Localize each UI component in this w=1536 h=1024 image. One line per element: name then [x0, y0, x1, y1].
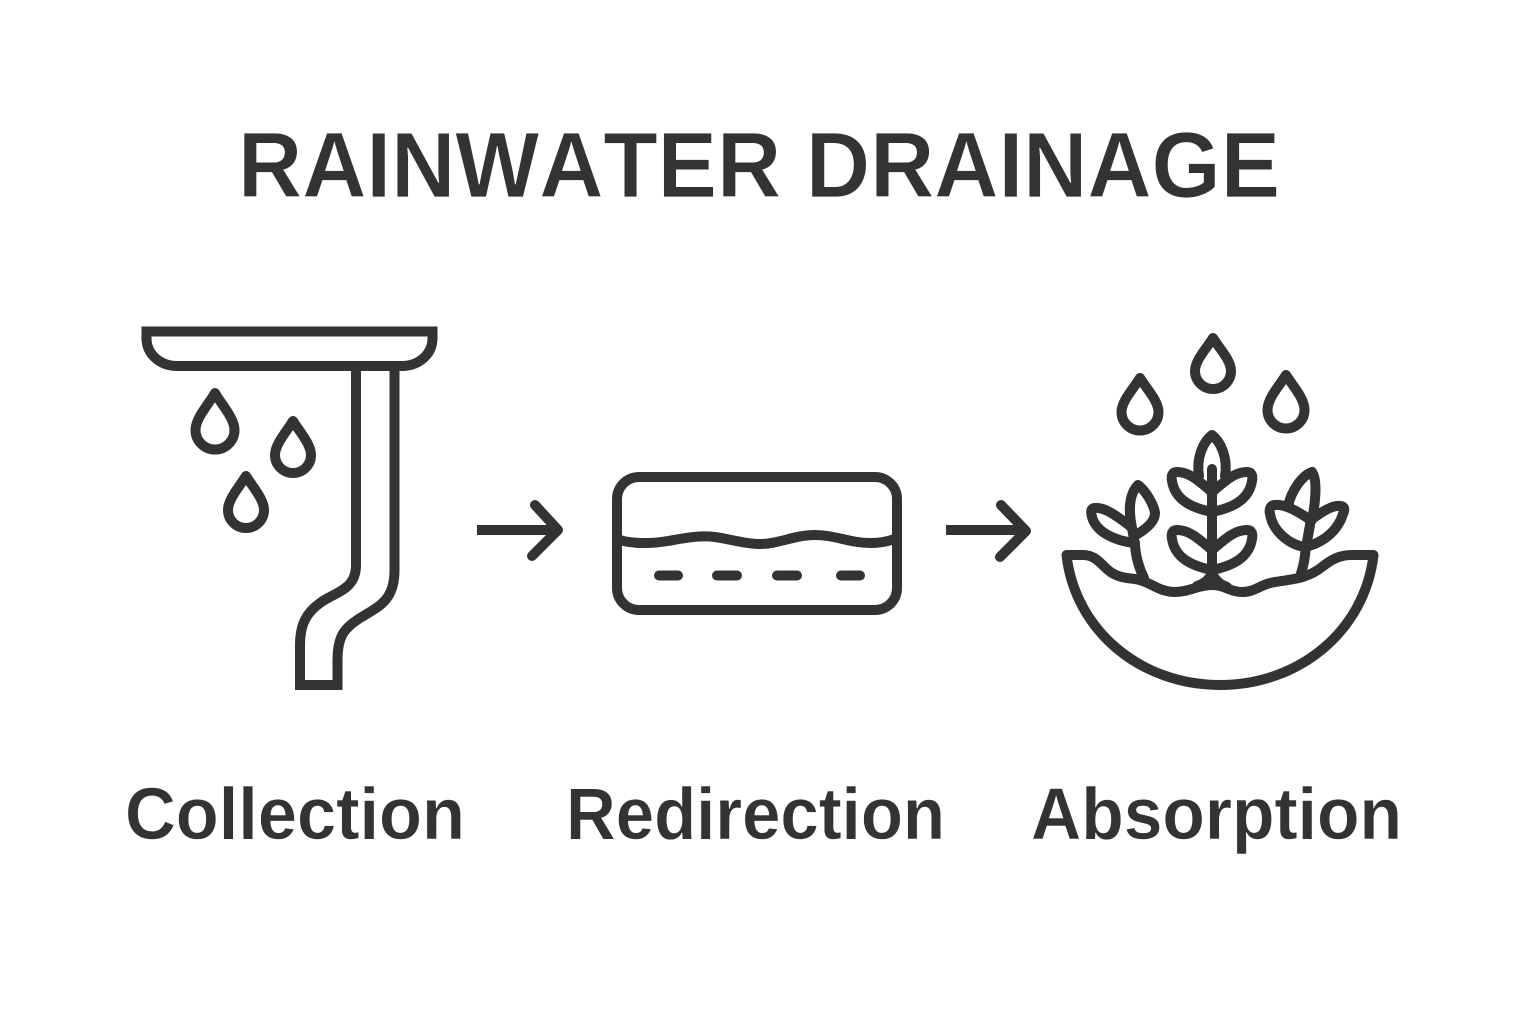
raindrop 3: [228, 476, 264, 528]
label: Redirection: Redirection: [566, 774, 945, 855]
right plant: [1270, 472, 1344, 577]
arrow: redirection to absorption: [946, 505, 1026, 557]
icon: drainage channel: [617, 477, 897, 610]
raindrop 1: [196, 393, 234, 450]
centre plant: [1172, 435, 1252, 587]
raindrop right: [1268, 375, 1304, 428]
channel frame: [617, 477, 897, 610]
left plant: [1091, 485, 1155, 578]
water surface wave: [617, 535, 897, 544]
downpipe: [300, 368, 394, 685]
gutter trough: [146, 332, 432, 366]
soil bowl: [1066, 555, 1374, 685]
arrow: collection to redirection: [477, 505, 558, 556]
icon: plants absorbing water in soil: [1066, 338, 1374, 685]
raindrop 2: [275, 421, 311, 473]
flow dashes: [659, 570, 860, 580]
raindrop top: [1195, 338, 1231, 389]
icon: gutter collecting rain: [146, 332, 432, 685]
raindrop left: [1122, 378, 1158, 430]
label: Absorption: Absorption: [1031, 774, 1402, 855]
title: RAINWATER DRAINAGE: [238, 113, 1280, 217]
label: Collection: Collection: [125, 774, 465, 855]
